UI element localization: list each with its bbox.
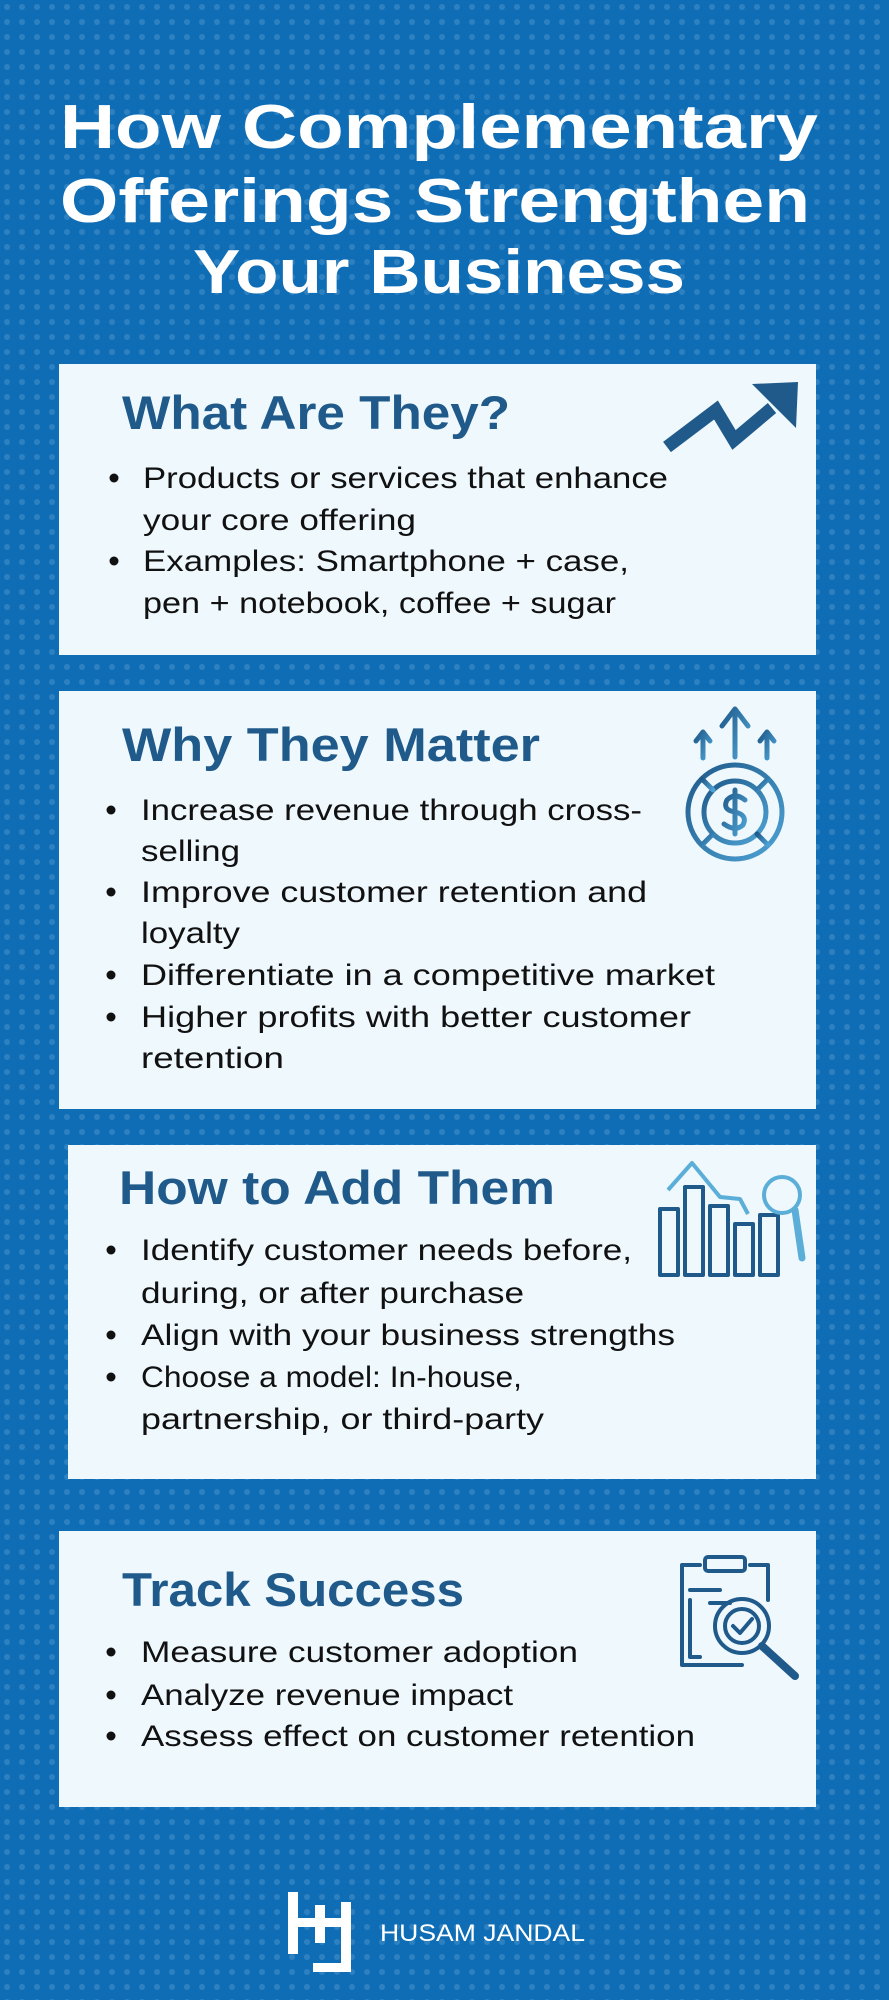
heading: why they matter: Why They Matter <box>122 718 540 771</box>
bullets: how to add them <box>106 1234 675 1436</box>
bullets: why they matter: Improve customer retention and <box>141 876 647 909</box>
icon: bar chart with magnifier <box>660 1163 802 1275</box>
bullets: what are they: Examples: Smartphone + case, <box>143 545 629 578</box>
icon: clipboard with magnifier <box>682 1557 795 1676</box>
icon: HJ monogram <box>288 1892 351 1972</box>
icon: trend arrow <box>667 382 798 447</box>
bullets: why they matter <box>106 794 716 1075</box>
bullets: what are they: pen + notebook, coffee + sugar <box>143 587 616 620</box>
bullets: how to add them: Align with your business strengths <box>141 1319 675 1352</box>
title: Your Business <box>193 238 685 307</box>
bullets: why they matter: Increase revenue through cross- <box>141 794 642 827</box>
icon: coin with arrows <box>688 709 782 859</box>
bullets: how to add them: partnership, or third-party <box>141 1403 544 1436</box>
panel: why they matter <box>59 691 816 1109</box>
panel: what are they <box>59 364 816 655</box>
bullets: track success: Analyze revenue impact <box>141 1679 514 1712</box>
bullets: track success: Assess effect on customer retention <box>141 1720 695 1753</box>
logo text: HUSAM JANDAL <box>380 1920 585 1947</box>
bullets: what are they: Products or services that enhance <box>143 462 668 495</box>
heading: track success: Track Success <box>122 1563 464 1616</box>
bullets: how to add them: Choose a model: In-house, <box>141 1361 522 1394</box>
bullets: why they matter: Higher profits with better customer <box>141 1001 691 1034</box>
bullets: what are they <box>110 462 668 620</box>
bullets: why they matter: retention <box>141 1042 284 1075</box>
bullets: why they matter: Differentiate in a competitive market <box>141 959 716 992</box>
heading: how to add them: How to Add Them <box>119 1161 555 1214</box>
logo: husam jandal <box>288 1892 585 1972</box>
panel: track success <box>59 1531 816 1807</box>
heading: what are they: What Are They? <box>122 386 510 439</box>
bullets: how to add them: Identify customer needs before, <box>141 1234 632 1267</box>
bullets: why they matter: selling <box>141 835 240 868</box>
bullets: why they matter: loyalty <box>141 917 240 950</box>
bullets: track success: Measure customer adoption <box>141 1636 578 1669</box>
title: Offerings Strengthen <box>60 167 810 236</box>
bullets: what are they: your core offering <box>143 504 416 537</box>
bullets: how to add them: during, or after purchase <box>141 1277 524 1310</box>
panel: how to add them <box>68 1145 816 1479</box>
title: How Complementary <box>60 93 819 162</box>
bullets: track success <box>106 1636 695 1753</box>
title <box>60 93 819 307</box>
